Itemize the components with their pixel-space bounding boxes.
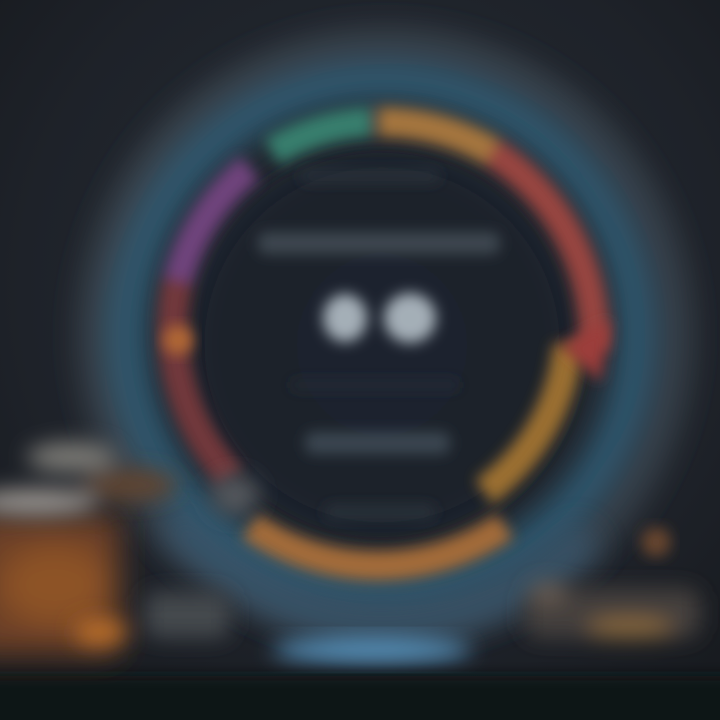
ring segment: orange top [378, 122, 492, 152]
object: bottom-left highlights [0, 442, 259, 645]
base: lower blue curve [170, 520, 590, 625]
object: bottom-right tan stack [525, 582, 700, 638]
inner dark disc [182, 145, 582, 545]
marker: orange left dot [163, 325, 193, 355]
object: bottom-left orange stack [0, 515, 120, 655]
colored ring [173, 122, 594, 566]
floor band [0, 676, 720, 720]
ring segment: orange right arrow [484, 345, 568, 492]
ring segment: red left [173, 280, 232, 478]
arrow head: red right [560, 320, 610, 382]
base glow: blue [272, 637, 472, 663]
center text blur: lower label [290, 380, 460, 519]
marker: orange dot right [641, 527, 671, 557]
center text blur: large figure [323, 293, 436, 343]
ring segment: green [272, 122, 372, 152]
ring segment: orange bottom [250, 526, 505, 566]
outer halo rings [93, 43, 677, 627]
center text blur: heading [258, 170, 500, 254]
ring segment: red right [492, 152, 594, 350]
ring segment: purple [178, 168, 250, 280]
